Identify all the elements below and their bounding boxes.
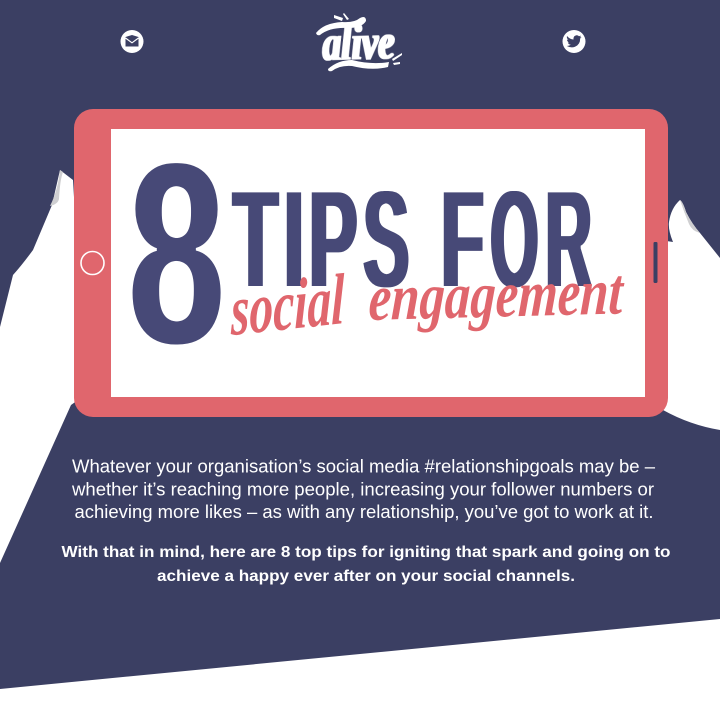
intro paragraph: achieving more likes – as with any relationship, you’ve got to work at it. (74, 502, 654, 522)
speaker (654, 242, 658, 283)
title tips for: O (490, 162, 538, 317)
title number 8: 8 (128, 109, 225, 398)
title tips for: S (363, 162, 409, 317)
title tips for: P (309, 162, 357, 317)
subtitle engagement: engagement (367, 255, 626, 335)
bold call to action (62, 544, 671, 585)
intro paragraph (71, 456, 655, 522)
infographic header: R (546, 162, 592, 317)
logo: alive (316, 13, 402, 71)
left hand (0, 170, 80, 563)
intro paragraph: Whatever your organisation’s social media #relationshipgoals may be – (72, 456, 655, 476)
title tips for: F (441, 162, 484, 317)
bold call to action: With that in mind, here are 8 top tips for igniting that spark and going on to (62, 544, 671, 561)
subtitle social: social (230, 259, 344, 351)
logo wordmark: alive (322, 13, 395, 71)
logo swash (328, 60, 389, 71)
right thumbnail (680, 200, 700, 233)
left thumbnail (50, 170, 63, 206)
phone screen (111, 129, 645, 397)
logo top flourish (316, 17, 366, 35)
home button (81, 252, 104, 274)
title tips for: I (284, 162, 304, 317)
phone (74, 109, 668, 417)
icon: email (120, 30, 144, 53)
icon: twitter (562, 30, 586, 53)
bold call to action: achieve a happy ever after on your social channels. (157, 568, 575, 585)
intro paragraph: whether it’s reaching more people, increasing your follower numbers or (71, 480, 654, 500)
white bottom band (0, 619, 720, 713)
right hand (660, 200, 720, 430)
logo sparks (334, 13, 402, 65)
phone body (74, 109, 668, 417)
title tips for: T (233, 162, 278, 317)
